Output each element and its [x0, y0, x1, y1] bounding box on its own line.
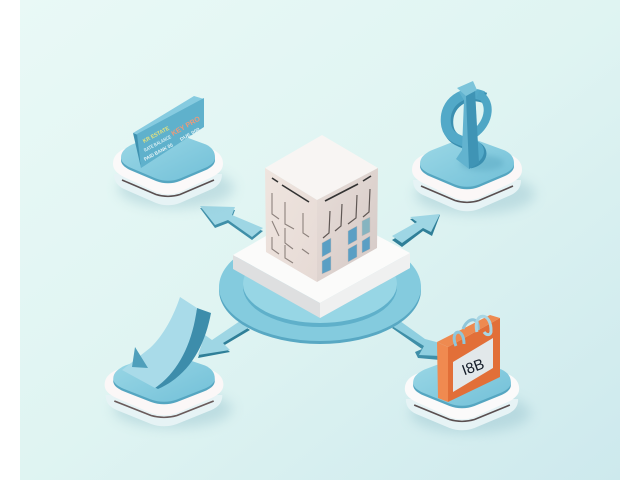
- platform: [412, 140, 535, 214]
- icon: small pointer: [132, 347, 148, 368]
- calendar label panel: [453, 338, 493, 392]
- panel: calendar platform: [405, 315, 531, 433]
- card text: RATE BALANCE: [143, 134, 173, 154]
- calendar label: I8B: [460, 356, 487, 379]
- panel: dollar platform: [412, 81, 535, 214]
- white slab: [233, 205, 410, 318]
- arrow: down-left: [198, 321, 250, 358]
- platform: [113, 134, 234, 208]
- card text: KR ESTATE: [142, 126, 171, 145]
- arrow: up-right: [392, 214, 440, 247]
- panel: ticket platform: [105, 297, 232, 428]
- cube left face marks: [272, 178, 309, 263]
- card text: KEY PRO: [170, 115, 202, 138]
- card text: PAID BANK 00: [143, 142, 174, 163]
- cube windows: [322, 217, 370, 274]
- calendar rings: [454, 316, 491, 346]
- card text: [142, 115, 202, 163]
- icon: dollar sign: [446, 81, 504, 171]
- card text: DUE 000: [179, 126, 201, 142]
- icon: curved ticket: [122, 297, 211, 389]
- cube right face marks: [323, 176, 371, 238]
- panel: credit card platform: [113, 96, 234, 208]
- outer disc: [219, 233, 421, 344]
- arrow: down-right: [392, 321, 440, 360]
- icon: credit card: [133, 96, 204, 168]
- cube: [265, 135, 378, 282]
- panel: central building: [219, 135, 421, 344]
- arrow: up-left: [200, 206, 263, 240]
- platform: [105, 354, 232, 428]
- platform: [405, 358, 531, 433]
- inner disc: [243, 245, 397, 327]
